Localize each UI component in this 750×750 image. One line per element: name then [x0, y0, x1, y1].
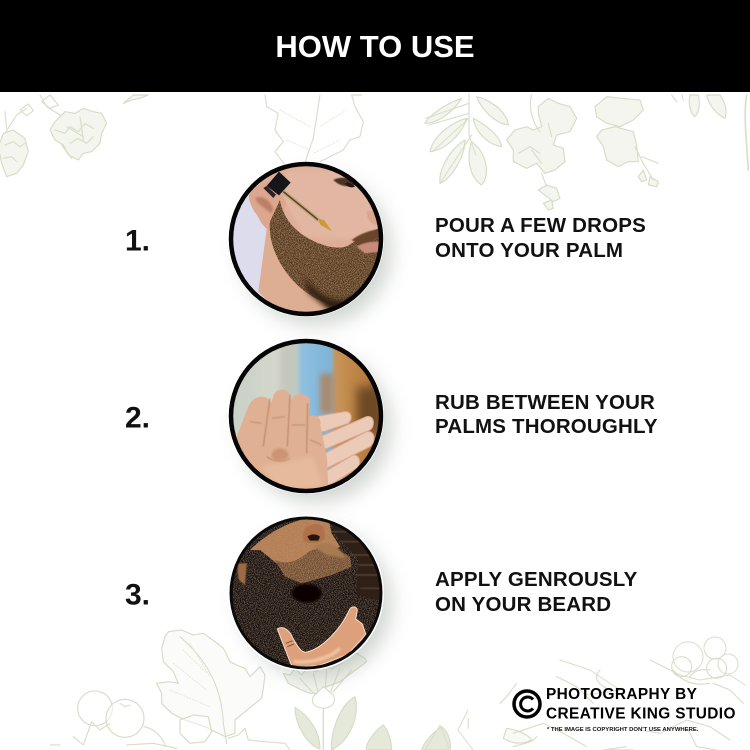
- step 1 text: [435, 214, 646, 262]
- copyright block: [514, 686, 736, 733]
- photography credit: [546, 686, 736, 722]
- icon: copyright: [514, 691, 540, 717]
- step 2 text: [435, 391, 658, 438]
- botanical: top right leaves and flowers: [425, 93, 748, 210]
- step 3 text: ON YOUR BEARD: [435, 593, 611, 616]
- botanical: top left sprigs: [0, 95, 148, 177]
- botanical: far right berries: [425, 637, 745, 750]
- photo circle 3: beard and hand: [227, 515, 391, 678]
- header bar: [0, 0, 750, 92]
- photography credit: CREATIVE KING STUDIO: [546, 706, 736, 722]
- step 1 number: 1.: [125, 224, 150, 258]
- botanical: bottom left leaf and berries: [50, 630, 468, 750]
- title: HOW TO USE: [275, 29, 475, 64]
- copyright notice: * THE IMAGE IS COPYRIGHT DON'T USE ANYWHERE.: [547, 727, 699, 733]
- photo circle 2: rubbing palms: [227, 337, 391, 505]
- step 2 text: PALMS THOROUGHLY: [435, 415, 658, 438]
- step 2 text: RUB BETWEEN YOUR: [435, 391, 655, 414]
- photo circle 1: dropper on beard: [227, 157, 397, 325]
- step 1 text: POUR A FEW DROPS: [435, 214, 646, 237]
- step 3 text: [435, 568, 638, 616]
- step 1 text: ONTO YOUR PALM: [435, 239, 623, 262]
- step 2 number: 2.: [125, 402, 150, 434]
- botanical: top centre leaf: [265, 95, 363, 173]
- step 3 text: APPLY GENROUSLY: [435, 568, 638, 591]
- step 3 number: 3.: [125, 578, 150, 612]
- photography credit: PHOTOGRAPHY BY: [546, 686, 698, 703]
- botanical: bottom right flowers: [500, 657, 743, 750]
